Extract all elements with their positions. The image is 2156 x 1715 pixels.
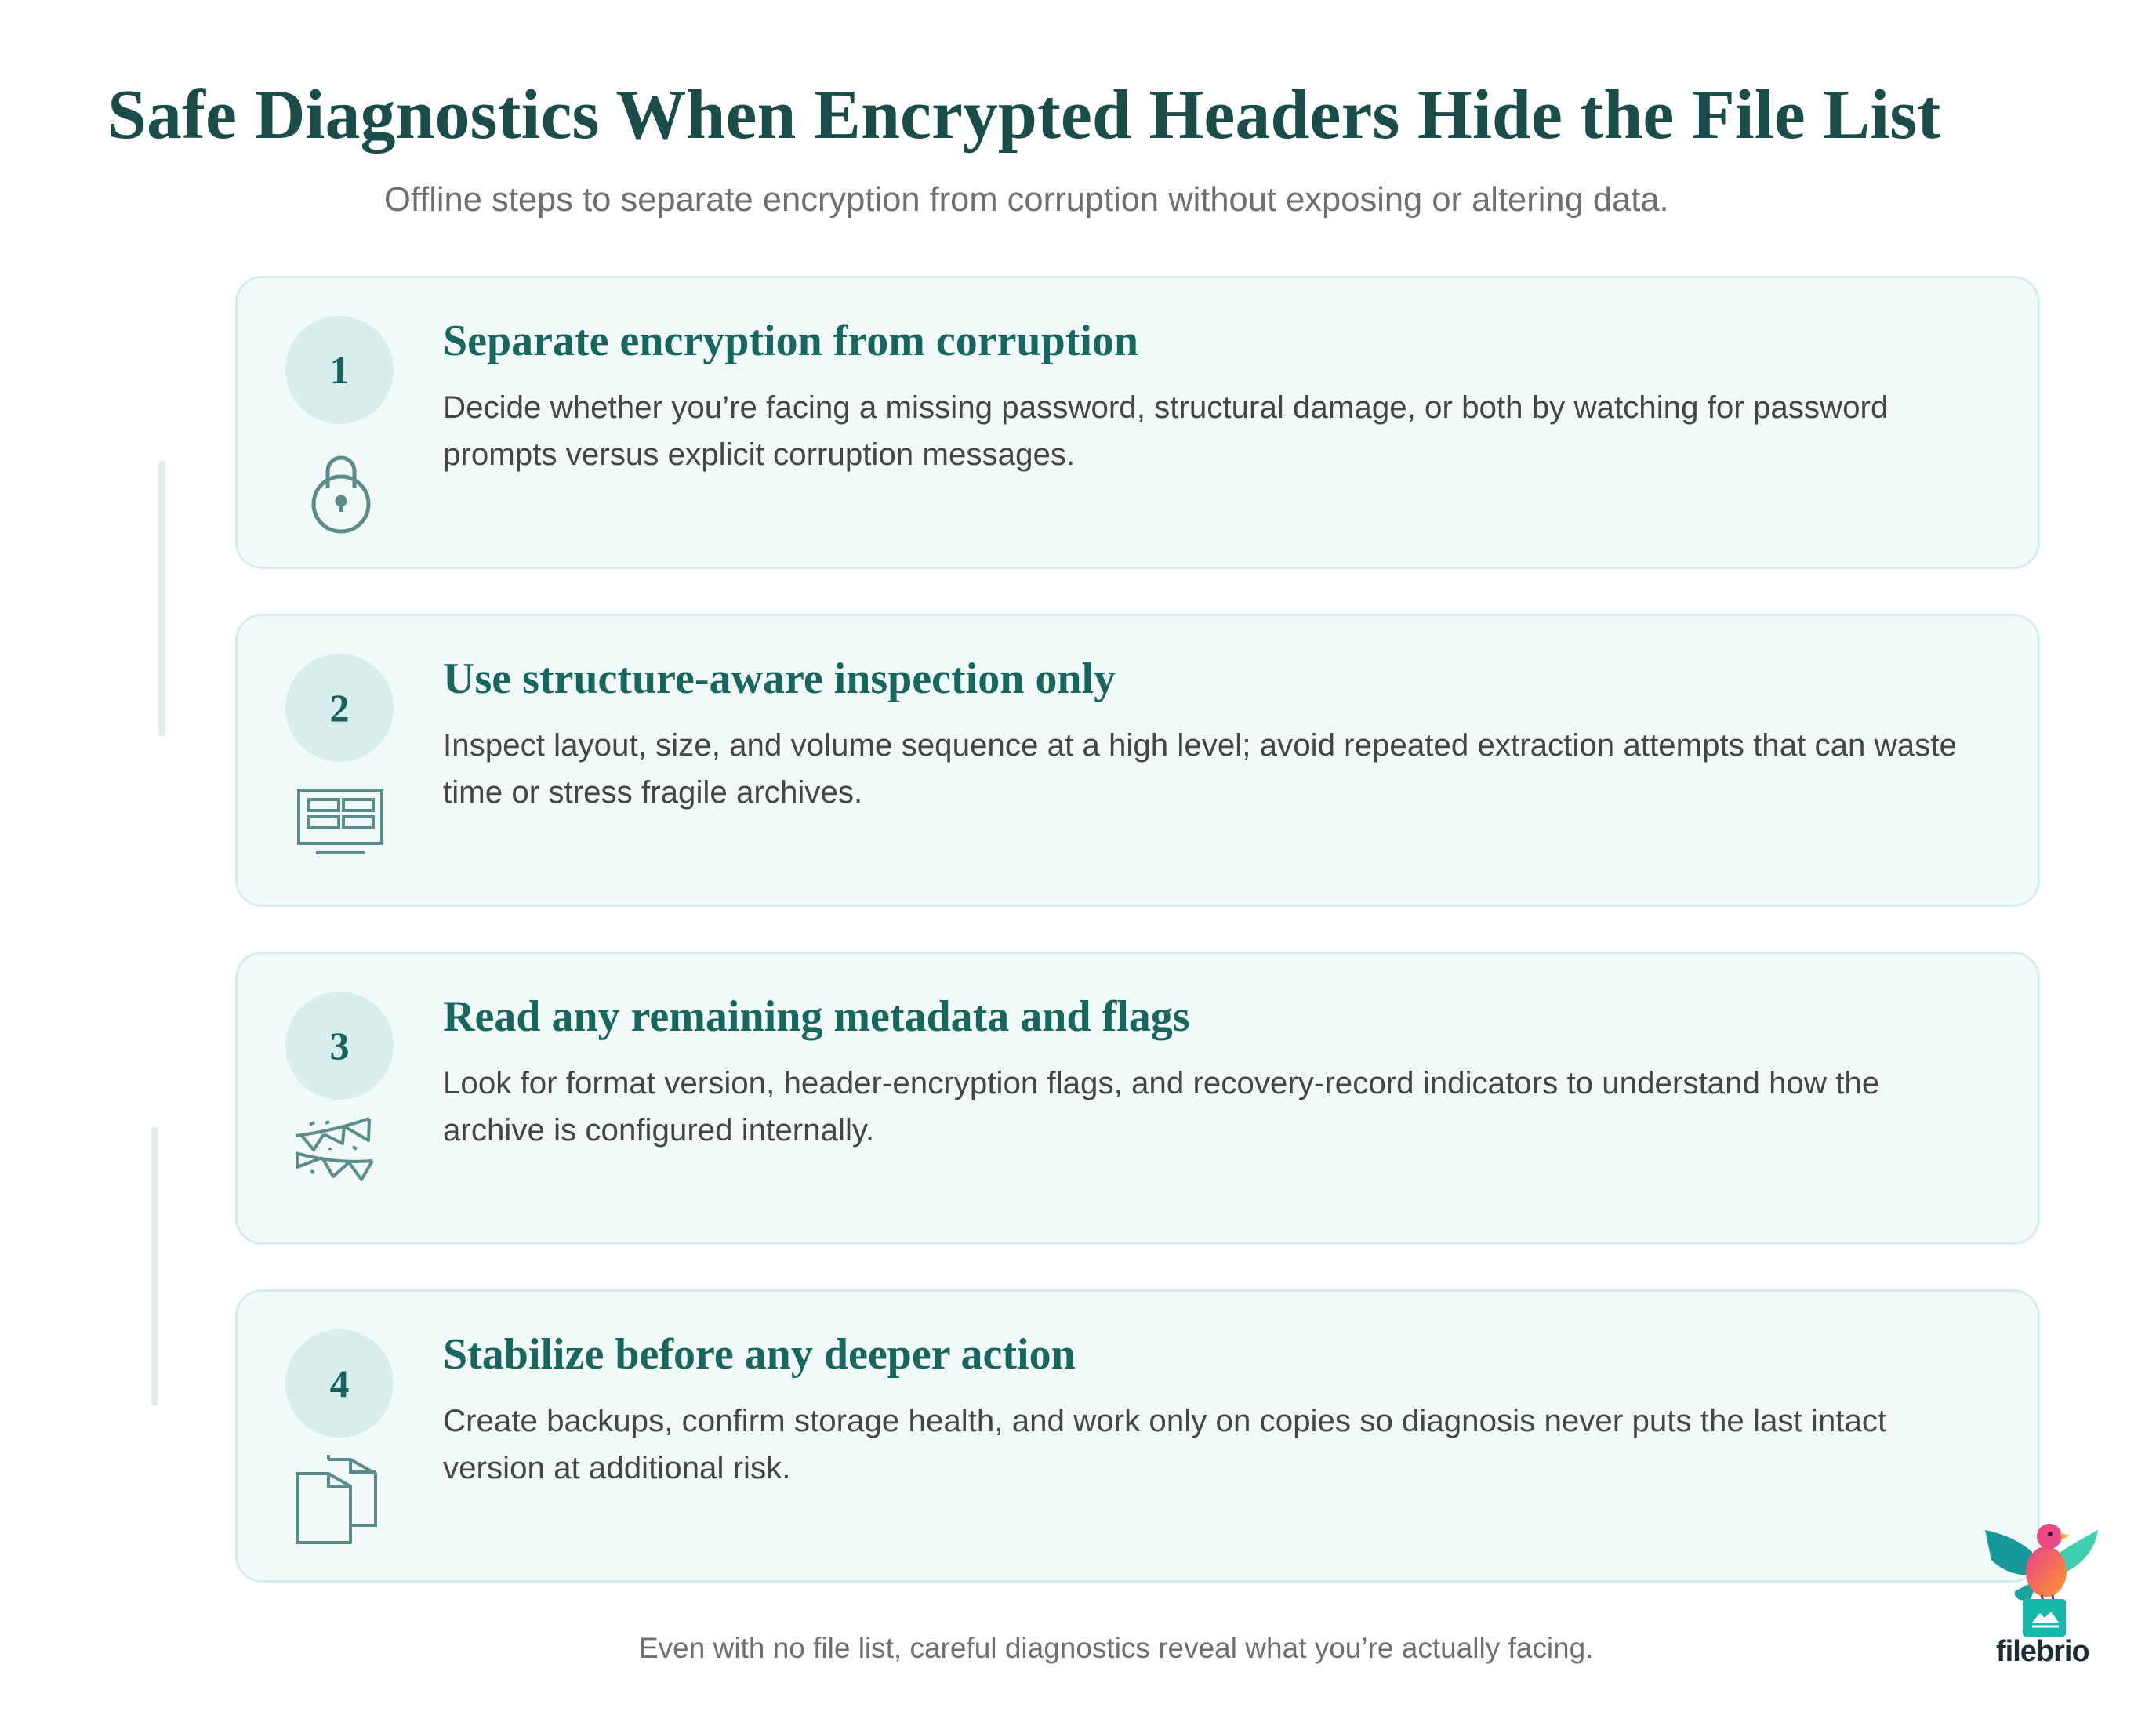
number 2 — [285, 654, 394, 762]
card 1 — [235, 276, 2040, 569]
timeline bar — [151, 1126, 158, 1405]
icon: lock — [312, 456, 370, 533]
text 4: version at additional risk. — [443, 1450, 790, 1485]
subtitle: Offline steps to separate encryption from corruption without exposing or altering data. — [384, 181, 1669, 219]
heading 1: Separate encryption from corruption — [443, 317, 1138, 365]
text 2 — [443, 727, 1957, 810]
heading 4: Stabilize before any deeper action — [443, 1330, 1076, 1379]
icon: copies — [296, 1455, 377, 1544]
text 1: prompts versus explicit corruption messages. — [443, 437, 1075, 472]
text 2: Inspect layout, size, and volume sequence at a high level; avoid repeated extraction attempts that can waste — [443, 727, 1957, 763]
text 3 — [443, 1065, 1879, 1148]
number 1: 1 — [329, 348, 350, 392]
timeline bar — [158, 460, 165, 737]
card 3 — [235, 952, 2040, 1245]
logo: filebrio — [1985, 1524, 2098, 1668]
card 4 — [235, 1289, 2040, 1583]
title: Safe Diagnostics When Encrypted Headers Hide the File List — [107, 76, 1940, 154]
footer note: Even with no file list, careful diagnostics reveal what you’re actually facing. — [639, 1632, 1593, 1664]
heading 3: Read any remaining metadata and flags — [443, 992, 1190, 1041]
text 3: archive is configured internally. — [443, 1112, 874, 1148]
icon: bunting — [295, 1117, 374, 1182]
number 1 — [285, 316, 394, 424]
card 2 — [235, 614, 2040, 907]
text 2: time or stress fragile archives. — [443, 774, 862, 810]
number 4 — [285, 1329, 394, 1438]
text 1: Decide whether you’re facing a missing password, structural damage, or both by watching for password — [443, 390, 1888, 425]
number 4: 4 — [329, 1361, 350, 1405]
text 4 — [443, 1403, 1886, 1485]
number 2: 2 — [329, 686, 350, 730]
number 3 — [285, 992, 394, 1100]
text 3: Look for format version, header-encryption flags, and recovery-record indicators to understand how the — [443, 1065, 1879, 1100]
heading 2: Use structure-aware inspection only — [443, 654, 1116, 703]
text 1 — [443, 390, 1888, 472]
number 3: 3 — [329, 1024, 350, 1068]
text 4: Create backups, confirm storage health, and work only on copies so diagnosis never puts the last intact — [443, 1403, 1886, 1438]
logo: filebrio: filebrio — [1996, 1635, 2089, 1668]
icon: layout screen — [297, 789, 383, 854]
